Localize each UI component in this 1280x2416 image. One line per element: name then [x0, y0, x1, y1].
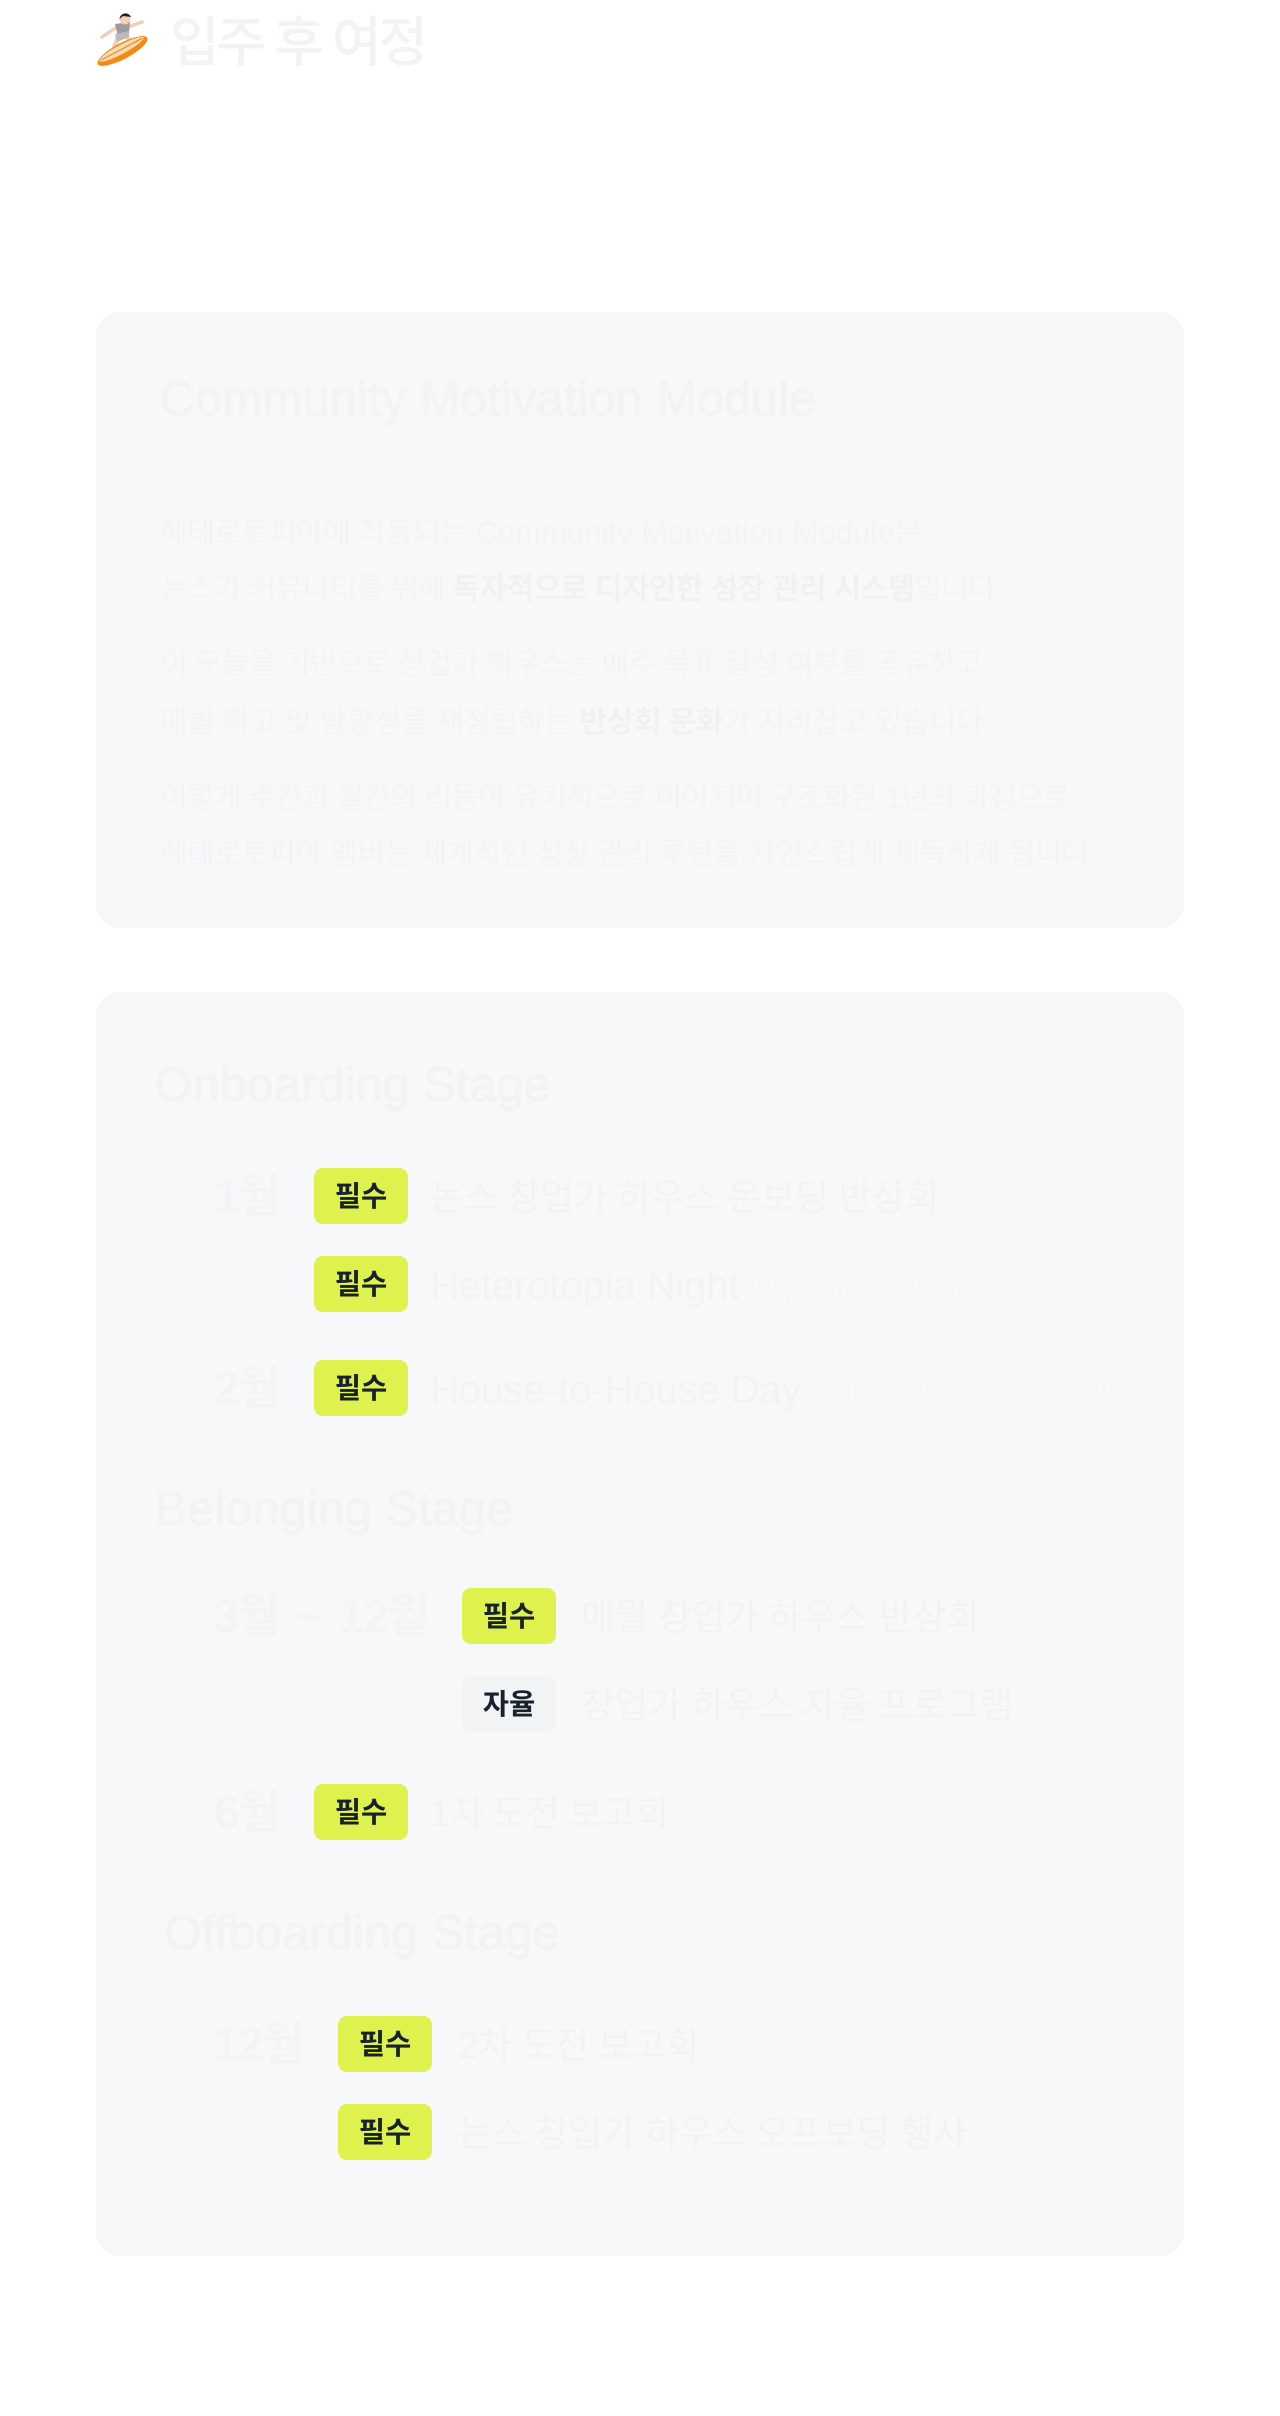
text block: module description: 이렇게 주간과 월간의 리듬이 유기적으로 이어지며 구조화된 1년의 과정으로 — [160, 782, 1070, 815]
row: 1월 onboarding meeting: 1월 — [214, 1170, 280, 1222]
row: Heterotopia Night — [314, 1256, 1109, 1312]
badge: 필수 — [338, 2104, 432, 2160]
heading: Onboarding Stage: Onboarding Stage — [155, 1059, 551, 1112]
badge: 필수: 필수 — [483, 1601, 535, 1633]
row: 6월 first challenge report — [214, 1784, 668, 1840]
badge: 필수 — [462, 1588, 556, 1644]
badge: 필수: 필수 — [335, 1797, 387, 1829]
row: offboarding event: 논스 창업가 하우스 오프보딩 행사 — [458, 2113, 967, 2154]
row: 1월 onboarding meeting — [214, 1168, 939, 1224]
badge: 필수: 필수 — [335, 1373, 387, 1405]
title: 입주 후 여정 — [170, 13, 425, 73]
badge: 자율: 자율 — [483, 1689, 535, 1721]
text block: module description: 매월 회고 및 방향성을 재정립하는 반상회 문화가 자리잡고 있습니다. — [160, 706, 991, 739]
badge: 자율 — [462, 1676, 556, 1732]
badge: 필수: 필수 — [359, 2029, 411, 2061]
row: 12월 second challenge report — [214, 2016, 699, 2072]
panel: stages timeline — [96, 992, 1184, 2256]
row: 12월 second challenge report: 12월 — [214, 2018, 304, 2070]
badge: 필수 — [338, 2016, 432, 2072]
section: Offboarding Stage — [164, 1907, 967, 2160]
badge: 필수 — [314, 1784, 408, 1840]
panel: Community Motivation Module — [96, 312, 1184, 928]
badge: 필수 — [314, 1168, 408, 1224]
heading: Offboarding Stage: Offboarding Stage — [164, 1907, 560, 1960]
text block: module description: 논스가 커뮤니티를 위해 독자적으로 디자인한 성장 관리 시스템입니다. — [160, 573, 1003, 606]
heading: Community Motivation Module: Community Motivation Module — [160, 373, 816, 426]
row: 1월 onboarding meeting: 논스 창업가 하우스 온보딩 반상회 — [430, 1177, 939, 1218]
arrow: timeline — [161, 1983, 181, 2193]
row: 3월 ~ 12월 monthly meeting: 매월 창업가 하우스 반상회 — [581, 1597, 979, 1638]
badge: 필수: 필수 — [359, 2117, 411, 2149]
row: autonomous program: 창업가 하우스 자율 프로그램 — [581, 1685, 1013, 1726]
icon: surfer emoji — [98, 13, 148, 66]
badge: 필수 — [314, 1360, 408, 1416]
heading: Belonging Stage: Belonging Stage — [155, 1483, 513, 1536]
row: 3월 ~ 12월 monthly meeting — [213, 1588, 979, 1644]
row: offboarding event — [338, 2104, 967, 2160]
row: Heterotopia Night: Heterotopia Night — [430, 1264, 739, 1308]
section: Onboarding Stage — [155, 1059, 1117, 1416]
section: Belonging Stage — [155, 1483, 1013, 1840]
row: 2월 House-to-House Day: House-to-House Day — [430, 1368, 801, 1412]
row: 3월 ~ 12월 monthly meeting: 3월 ~ 12월 — [213, 1590, 429, 1642]
badge: 필수: 필수 — [335, 1181, 387, 1213]
row: 2월 House-to-House Day: 창업 기반 커뮤니티 네트워킹 행사 — [811, 1381, 1117, 1408]
text block: module description: 헤테로토피아 멤버는 체계적인 성장 관리 루틴을 자연스럽게 체득하게 됩니다. — [160, 838, 1097, 871]
text block: module description — [160, 508, 1120, 882]
row: 2월 House-to-House Day — [214, 1360, 1117, 1416]
text block: module description: 이 모듈을 기반으로 창업가 하우스는 매주 목표 달성 여부를 공유하고, — [160, 648, 990, 681]
row: 6월 first challenge report: 6월 — [214, 1786, 280, 1838]
row: 2월 House-to-House Day: 2월 — [214, 1362, 280, 1414]
row: Heterotopia Night: 입주자 간 친목을 위한 밍글링 프로그램 — [757, 1277, 1109, 1304]
badge: 필수: 필수 — [335, 1269, 387, 1301]
row: 12월 second challenge report: 2차 도전 보고회 — [458, 2025, 699, 2066]
row: 6월 first challenge report: 1차 도전 보고회 — [430, 1793, 668, 1834]
text block: module description: 헤테로토피아에 작동되는 Community Motivation Module은 — [160, 515, 922, 550]
badge: 필수 — [314, 1256, 408, 1312]
